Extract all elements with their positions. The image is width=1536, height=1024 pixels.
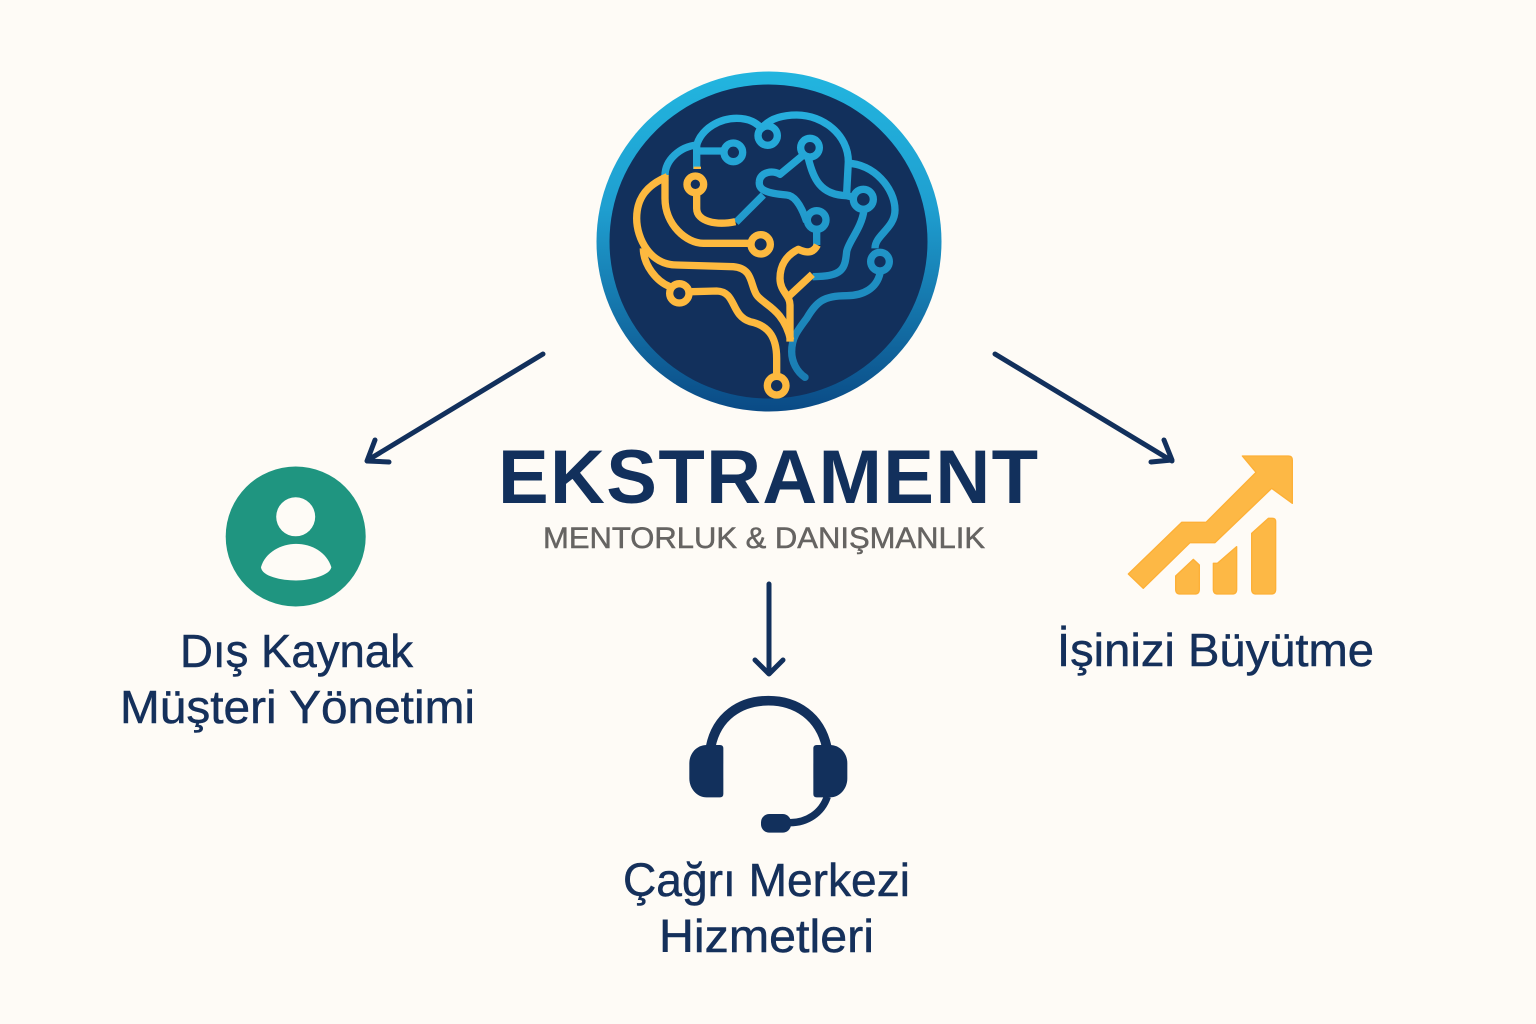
subtitle: MENTORLUK & DANIŞMANLIK	[543, 522, 985, 555]
label: call center services	[623, 854, 910, 962]
emblem ring	[596, 72, 942, 412]
label: call center services: Hizmetleri	[659, 910, 874, 962]
label: outsourced customer management	[120, 625, 475, 733]
label: grow your business: İşinizi Büyütme	[1057, 624, 1374, 676]
blue circuit lines	[665, 115, 895, 377]
emblem inner disc	[610, 84, 928, 398]
arrow: to call center	[755, 584, 783, 674]
title: EKSTRAMENT: EKSTRAMENT	[498, 435, 1038, 520]
label: outsourced customer management: Dış Kaynak	[180, 625, 414, 677]
brain circuit lines	[637, 115, 895, 395]
arrow: to outsourced customer management	[367, 354, 543, 462]
icon: headset	[689, 701, 847, 833]
label: outsourced customer management: Müşteri Yönetimi	[120, 681, 475, 733]
icon: growth chart	[1128, 456, 1292, 594]
logo: brain emblem	[596, 72, 942, 412]
arrow: to business growth	[995, 354, 1172, 462]
icon: person	[226, 466, 366, 606]
label: call center services: Çağrı Merkezi	[623, 854, 910, 906]
yellow circuit lines	[637, 167, 817, 395]
